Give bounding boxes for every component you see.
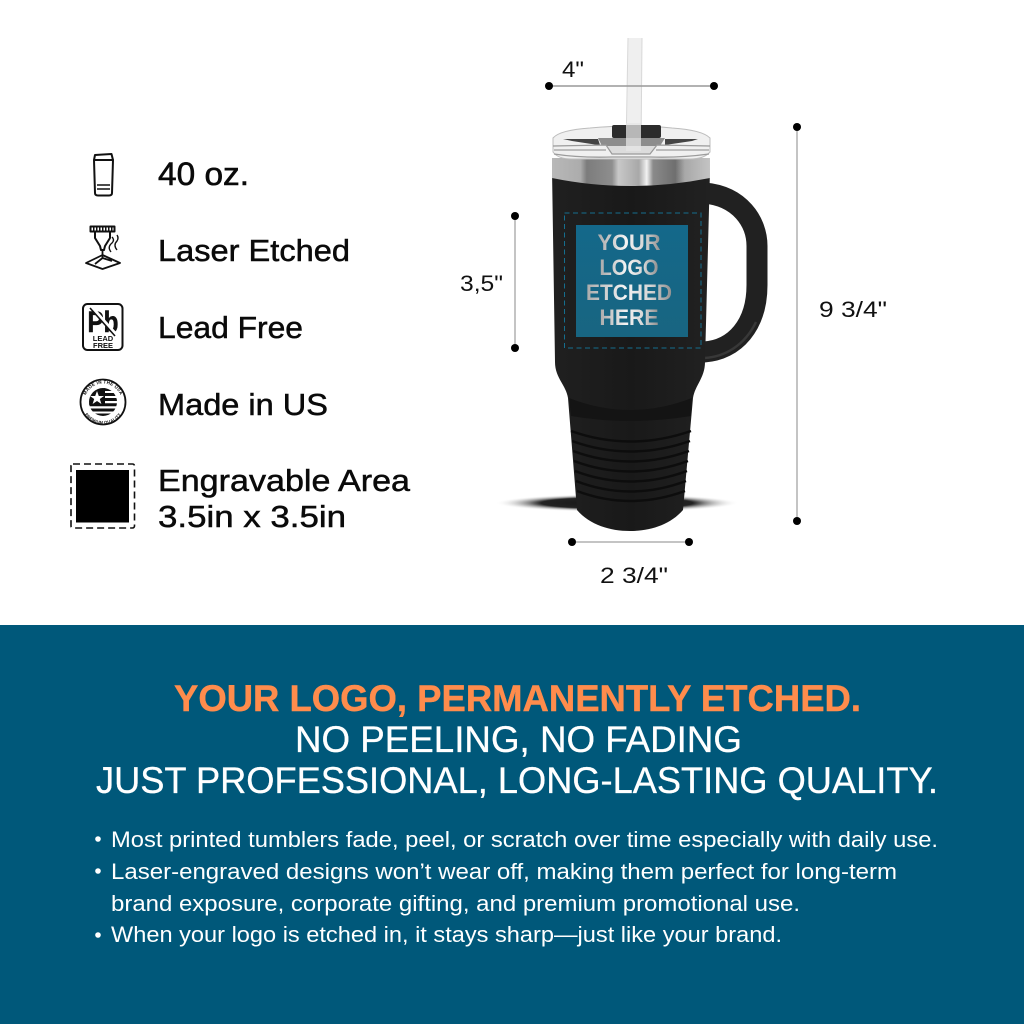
product: tumbler with dimensions: [460, 38, 887, 588]
heading: [96, 678, 938, 801]
steel collar: [552, 158, 710, 186]
ground shadow: [495, 494, 739, 512]
icon: lead free badge: LEAD: [93, 334, 114, 343]
straw: [626, 38, 642, 150]
icon: made in the USA seal: PREMIUM QUALITY: [85, 412, 120, 424]
dimension: 2 3/4 inch base: 2 3/4": [600, 563, 668, 588]
icon: lead free badge: [83, 304, 122, 350]
text: Laser Etched: Laser Etched: [158, 233, 350, 268]
dimension: 2 3/4 inch base: [568, 538, 693, 588]
tumbler handle: [704, 193, 757, 358]
dimension: 9 3/4 inch height: 9 3/4": [819, 297, 887, 322]
logo placeholder: ETCHED: [586, 280, 672, 305]
text: Lead Free: Lead Free: [158, 310, 303, 345]
text: 40 oz.: 40 oz.: [158, 156, 249, 192]
engraving dashed area: [564, 213, 701, 348]
logo placeholder: [576, 225, 688, 337]
bullet list: brand exposure, corporate gifting, and premium promotional use.: [111, 891, 800, 916]
icon: made in the USA seal: MADE IN THE USA: [83, 380, 122, 395]
heading: JUST PROFESSIONAL, LONG-LASTING QUALITY.: [96, 760, 938, 801]
text: Made in US: Made in US: [158, 387, 328, 422]
body shadow band: [569, 398, 692, 421]
dimension: 3,5 inch engraving height: [460, 212, 519, 352]
clear lid: [553, 123, 710, 159]
text: Engravable Area size: [158, 463, 411, 534]
icon: made in the USA seal: [80, 378, 126, 426]
icon: lead free badge: FREE: [93, 341, 113, 350]
dimension: 9 3/4 inch height: [793, 123, 887, 525]
bullet list: When your logo is etched in, it stays sharp—just like your brand.: [111, 922, 782, 947]
dimension: 4 inch width: [545, 57, 718, 90]
bullet list: Laser-engraved designs won’t wear off, making them perfect for long-term: [111, 859, 897, 884]
icon: tumbler: [94, 154, 113, 196]
text: Engravable Area size: 3.5in x 3.5in: [158, 499, 346, 534]
logo placeholder: HERE: [600, 305, 658, 330]
heading: YOUR LOGO, PERMANENTLY ETCHED.: [174, 678, 861, 719]
dimension: 4 inch width: 4": [562, 57, 584, 82]
icon: engravable area square: [71, 464, 134, 528]
icon: laser etching: [86, 226, 120, 269]
logo placeholder: YOUR: [598, 230, 661, 255]
panel: blue message band: [0, 625, 1024, 1024]
dimension: 3,5 inch engraving height: 3,5": [460, 271, 503, 296]
bullet list: Most printed tumblers fade, peel, or scratch over time especially with daily use.: [111, 827, 938, 852]
heading: NO PEELING, NO FADING: [295, 719, 742, 760]
icon: lead free badge: Pb: [88, 306, 118, 339]
logo placeholder: LOGO: [600, 255, 658, 280]
text: Engravable Area size: Engravable Area: [158, 463, 411, 498]
tumbler body: [552, 170, 710, 531]
bullet list: [95, 827, 938, 947]
panel: product specifications: [70, 153, 411, 534]
grip ridges: [571, 431, 691, 501]
